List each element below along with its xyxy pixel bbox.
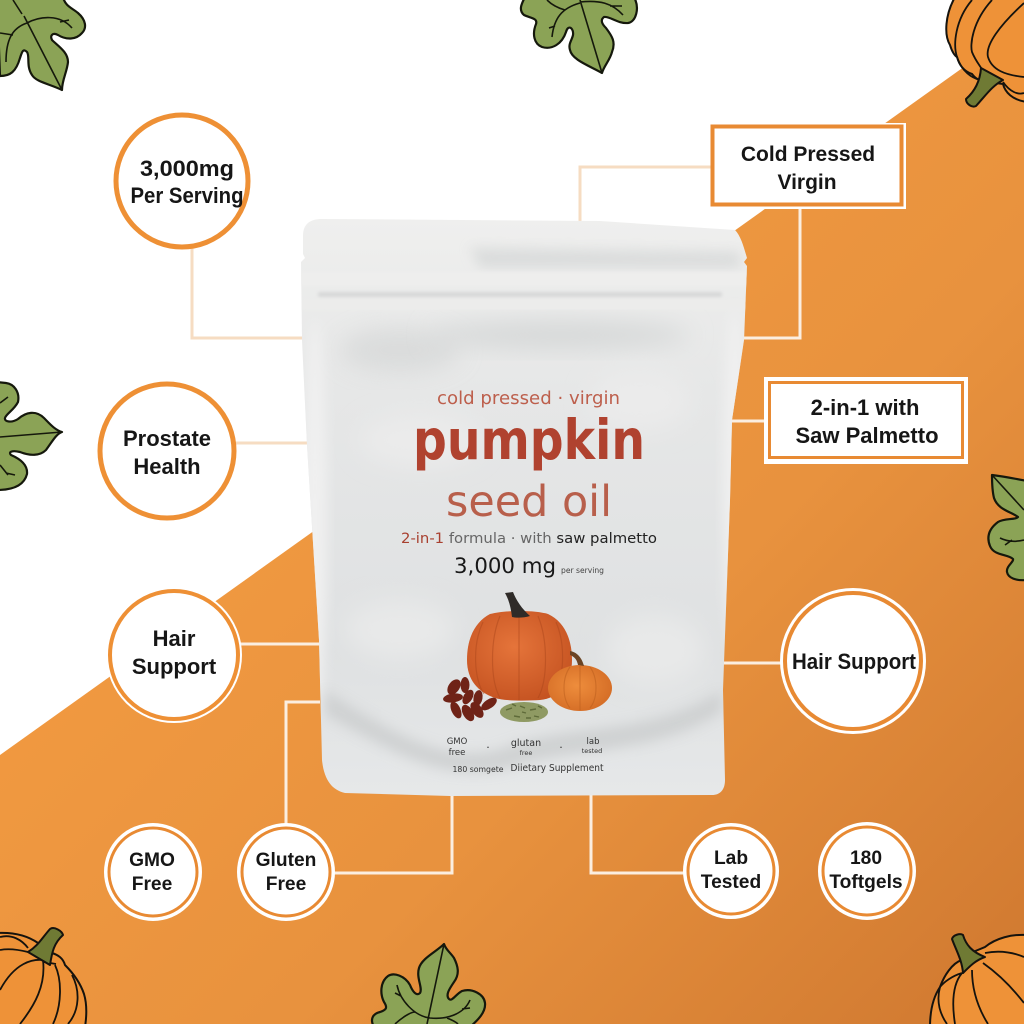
product subname: seed oil bbox=[446, 477, 612, 527]
badge: GMO free: GMO bbox=[129, 850, 175, 871]
box: 2-in-1 with saw palmetto: 2-in-1 with bbox=[811, 395, 919, 420]
formula line: 2-in-1 formula · with saw palmetto bbox=[401, 531, 657, 547]
pouch footer text: · bbox=[486, 741, 490, 754]
badge: GMO free: Free bbox=[132, 874, 173, 895]
badge: gluten free: Gluten bbox=[256, 850, 316, 871]
badge: lab tested: Lab bbox=[714, 848, 748, 869]
connector: prostate bbox=[234, 442, 308, 444]
leaf: top middle bbox=[521, 0, 637, 73]
pouch footer text: glutan bbox=[511, 738, 541, 749]
pouch footer text: lab bbox=[587, 737, 599, 747]
leaf: left bbox=[0, 382, 62, 490]
badge: 3,000mg per serving: Per Serving bbox=[130, 183, 244, 208]
pouch footer text: · bbox=[559, 741, 563, 754]
connector: cold pressed right bbox=[740, 206, 800, 338]
pouch footer text: GMO bbox=[447, 737, 468, 747]
pouch footer text: tested bbox=[582, 747, 602, 755]
pouch footer text: free bbox=[449, 748, 465, 758]
pouch bbox=[300, 219, 750, 796]
pouch body bbox=[301, 219, 747, 796]
leaf: right bbox=[988, 475, 1024, 580]
badge: GMO free bbox=[104, 823, 202, 921]
softgel capsules bbox=[442, 677, 499, 723]
tagline: cold pressed · virgin bbox=[437, 388, 620, 409]
badge: 180 softgels bbox=[818, 822, 916, 920]
connector: hair right bbox=[722, 662, 784, 664]
badge: 180 softgels: Toftgels bbox=[829, 872, 903, 893]
connector: 2-in-1 bbox=[730, 420, 766, 422]
product name: pumpkin bbox=[413, 408, 645, 472]
box: cold pressed virgin: Virgin bbox=[777, 171, 837, 194]
pouch label text bbox=[401, 388, 657, 579]
connector: gluten lower bbox=[332, 795, 452, 873]
leaf: bottom middle bbox=[372, 944, 485, 1024]
connector: gluten upper bbox=[286, 702, 320, 826]
badge: prostate health: Health bbox=[133, 454, 201, 479]
badge: lab tested: Tested bbox=[701, 872, 761, 893]
badge: hair support right: Hair Support bbox=[792, 649, 917, 674]
badge: lab tested bbox=[683, 823, 779, 919]
badge: hair support right bbox=[780, 588, 926, 734]
pumpkin: bottom right bbox=[930, 934, 1024, 1024]
dose: 3,000 mg bbox=[454, 554, 556, 579]
dose unit: per serving bbox=[561, 566, 604, 575]
connector: cold pressed top bbox=[580, 167, 712, 221]
badge: gluten free: Free bbox=[266, 874, 307, 895]
badge: 3,000mg per serving: 3,000mg bbox=[140, 156, 234, 181]
small pumpkin bbox=[548, 651, 612, 711]
badge: gluten free bbox=[237, 823, 335, 921]
big pumpkin bbox=[467, 592, 572, 701]
pumpkin seeds pile bbox=[500, 702, 548, 722]
connector: hair left bbox=[240, 642, 320, 646]
connector: 3,000mg bbox=[192, 246, 304, 338]
badge: 180 softgels: 180 bbox=[850, 848, 882, 869]
pouch footer text: 180 somgete bbox=[452, 765, 504, 774]
badge: hair support left: Support bbox=[132, 654, 217, 679]
leaf: top left bbox=[0, 0, 85, 90]
pouch shading bbox=[300, 248, 750, 772]
pumpkin: top right bbox=[946, 0, 1024, 107]
pouch footer text bbox=[447, 737, 604, 774]
badge: hair support left bbox=[106, 587, 242, 723]
box: cold pressed virgin: Cold Pressed bbox=[741, 143, 875, 166]
badge: prostate health bbox=[100, 384, 234, 518]
connector: lab tested bbox=[591, 795, 685, 873]
badge: hair support left: Hair bbox=[153, 626, 196, 651]
badge: 3,000mg per serving bbox=[116, 115, 248, 247]
box: 2-in-1 with saw palmetto bbox=[764, 377, 968, 464]
pumpkin: bottom left bbox=[0, 928, 86, 1024]
pouch footer text: Diietary Supplement bbox=[510, 763, 604, 774]
box: 2-in-1 with saw palmetto: Saw Palmetto bbox=[795, 423, 939, 448]
box: cold pressed virgin bbox=[711, 123, 906, 209]
pouch footer text: free bbox=[520, 749, 532, 757]
badge: prostate health: Prostate bbox=[123, 426, 211, 451]
